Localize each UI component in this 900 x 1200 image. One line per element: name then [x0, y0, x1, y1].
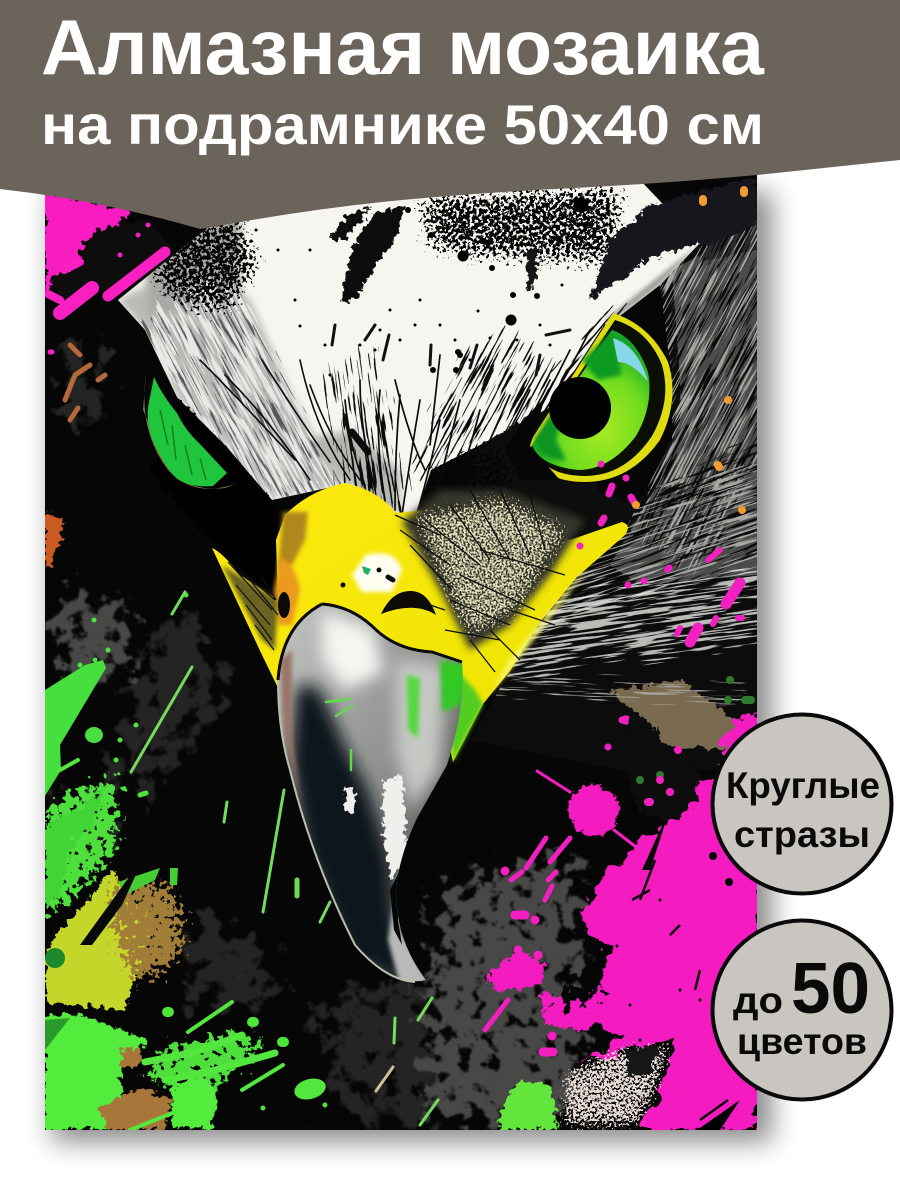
- black ink streaks on crown: [256, 205, 585, 450]
- right green eye: [526, 313, 672, 482]
- canvas drop shadow: [52, 192, 772, 1142]
- dark fur between eye and beak: [150, 400, 640, 620]
- magenta streaks on fur: [690, 583, 740, 642]
- dots on cere: [343, 570, 393, 585]
- badge: up to 50 colours: [712, 920, 892, 1100]
- magenta dabs on fur: [667, 550, 742, 634]
- orange streaks on left: [65, 345, 105, 420]
- nostrils: [278, 591, 436, 618]
- black streak on magenta: [642, 826, 664, 870]
- feather strokes over brow: [200, 325, 605, 530]
- upper right black patch: [590, 176, 757, 300]
- header banner: [0, 0, 900, 229]
- dark grey smudges: [45, 330, 590, 1130]
- badge text line 1: Круглые: [726, 765, 880, 806]
- magenta top left splash: [45, 192, 170, 352]
- badge text: up to: до: [733, 980, 783, 1021]
- badge number 50: 50: [791, 949, 870, 1029]
- badge text line 2: стразы: [734, 814, 870, 855]
- beak dark shading: [290, 684, 412, 985]
- title line 1: Алмазная мозаика: [41, 3, 765, 91]
- olive speckled face: [395, 490, 585, 672]
- painting base: [45, 170, 757, 1130]
- right side grey fur: [496, 220, 757, 752]
- title line 2: на подрамнике 50х40 см: [41, 93, 764, 156]
- green fleck on cere: [362, 566, 371, 575]
- painting: eagle on canvas: [45, 175, 757, 1130]
- white head crown: [118, 184, 700, 513]
- yellow cere and gape: [212, 483, 628, 762]
- magenta splashes by eye: [580, 464, 669, 747]
- badge: round rhinestones: [712, 714, 892, 894]
- neon green splashes lower left: [45, 592, 438, 1130]
- magenta mass lower right: [483, 680, 757, 1130]
- green blob bottom: [500, 1082, 557, 1130]
- orange flecks: [636, 190, 744, 510]
- grey hooked beak: [278, 604, 470, 985]
- badge text: colours: цветов: [737, 1021, 867, 1062]
- left green eye: [143, 375, 240, 489]
- orange left fleck: [45, 512, 63, 566]
